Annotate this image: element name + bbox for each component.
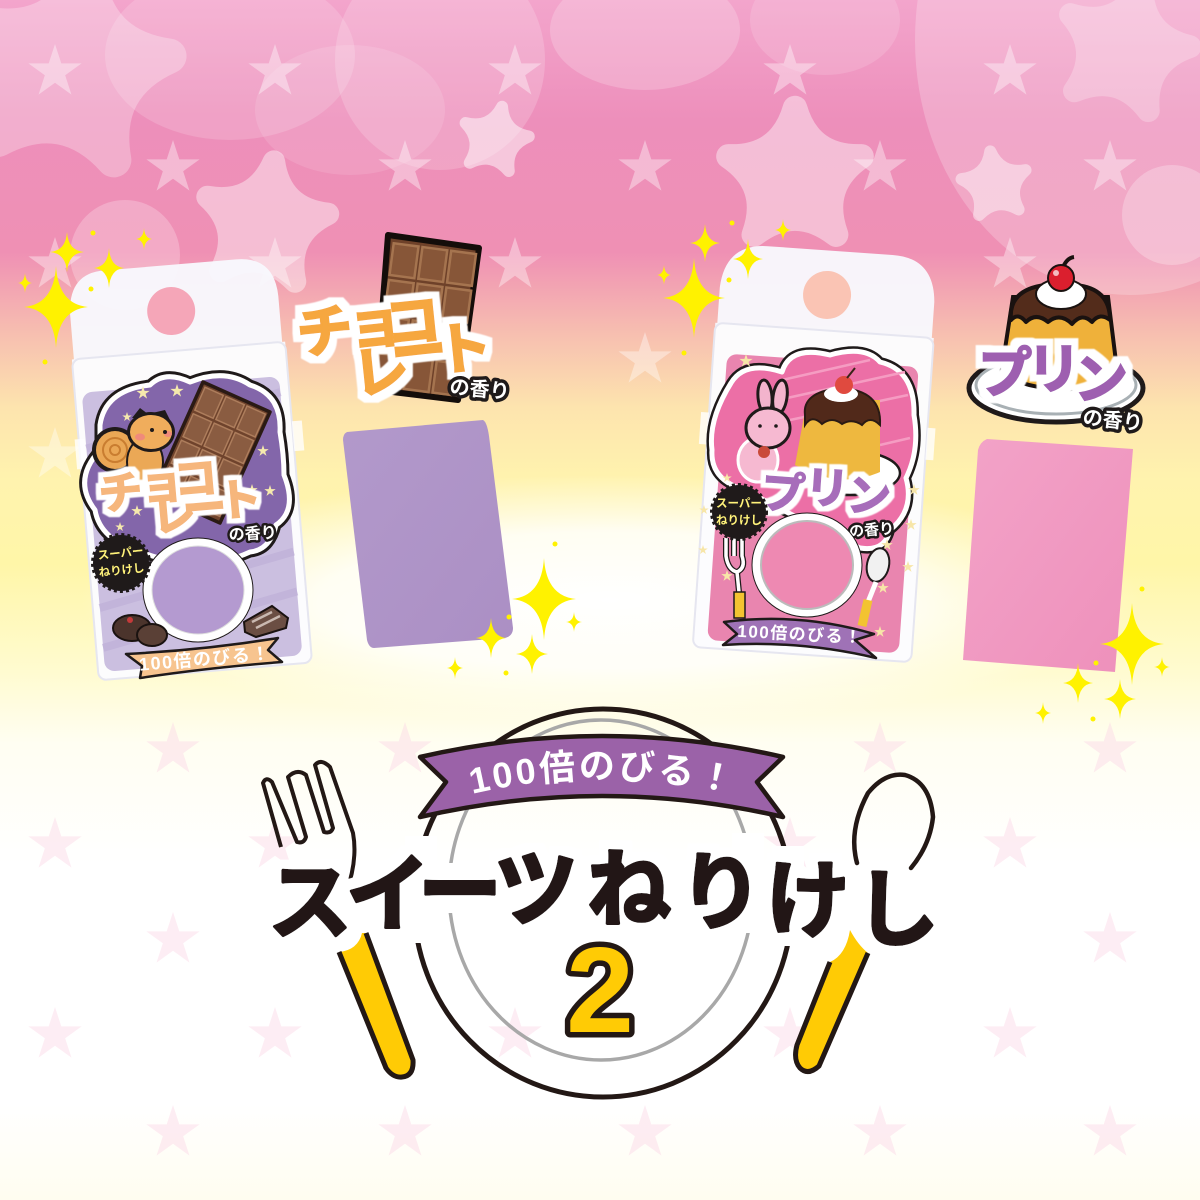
- background translucent blobs: [0, 0, 1200, 310]
- card banner: 100倍のびる！: 100倍のびる！: [737, 622, 863, 647]
- pudding eraser package: [685, 242, 947, 663]
- pudding illustration: [969, 257, 1143, 422]
- label: の香り: の香り: [1082, 406, 1144, 435]
- logo spoon: [796, 775, 933, 1072]
- sparkles around chocolate: [18, 228, 582, 679]
- logo: [261, 706, 939, 1100]
- pink eraser: [963, 439, 1133, 672]
- label: チョコレート: [294, 287, 495, 406]
- card label: の香り: の香り: [849, 519, 895, 541]
- card scent cloud: [711, 351, 916, 549]
- logo title: スイーツねりけし: スイーツねりけし: [268, 843, 939, 957]
- card bonbons: [113, 606, 288, 646]
- card spoon: [862, 546, 892, 626]
- card banner: 100倍のびる！: [723, 619, 876, 658]
- card label: の香り: の香り: [228, 524, 277, 544]
- label: プリン: プリン: [978, 340, 1128, 410]
- card banner: 100倍のびる！: 100倍のびる！: [138, 643, 272, 675]
- card badge: スーパーねりけし: [93, 535, 149, 591]
- card pudding: [795, 368, 900, 495]
- card label: プリン: プリン: [759, 463, 893, 523]
- card scent cloud: [85, 376, 289, 564]
- card badge: スーパーねりけし: スーパー: [716, 497, 762, 510]
- panel: pudding product: [657, 219, 1170, 724]
- logo plate: [405, 709, 804, 1097]
- chocolate bar illustration: [375, 235, 479, 400]
- purple eraser: [343, 420, 513, 648]
- logo fork: [263, 762, 413, 1077]
- card badge: スーパーねりけし: スーパー: [97, 545, 144, 562]
- card squirrel: [92, 408, 175, 486]
- card label: チョコレート: チョコ: [97, 453, 220, 520]
- label: チョコレート: レート: [350, 314, 495, 406]
- card fork: [726, 538, 745, 618]
- card label: チョコレート: レート: [150, 474, 264, 542]
- label: の香り: の香り: [449, 375, 510, 404]
- chocolate eraser package: [61, 255, 322, 681]
- sparkles around pudding: [657, 219, 1170, 724]
- label: チョコレート: チョコ: [294, 287, 444, 366]
- card bunny: [738, 379, 790, 482]
- card plate window: [143, 538, 253, 642]
- logo ribbon banner: 100倍のびる！: [470, 749, 722, 794]
- panel: chocolate product: [18, 228, 582, 681]
- card badge: スーパーねりけし: [712, 485, 766, 539]
- logo number 2: 2: [566, 922, 634, 1058]
- card label: チョコレート: [97, 453, 264, 542]
- card chocolate bar: [153, 382, 270, 523]
- card badge: スーパーねりけし: ねりけし: [98, 562, 145, 579]
- card banner: 100倍のびる！: [126, 638, 282, 678]
- card badge: スーパーねりけし: ねりけし: [716, 514, 762, 527]
- card plate window: [752, 513, 862, 617]
- logo ribbon banner: [418, 734, 786, 820]
